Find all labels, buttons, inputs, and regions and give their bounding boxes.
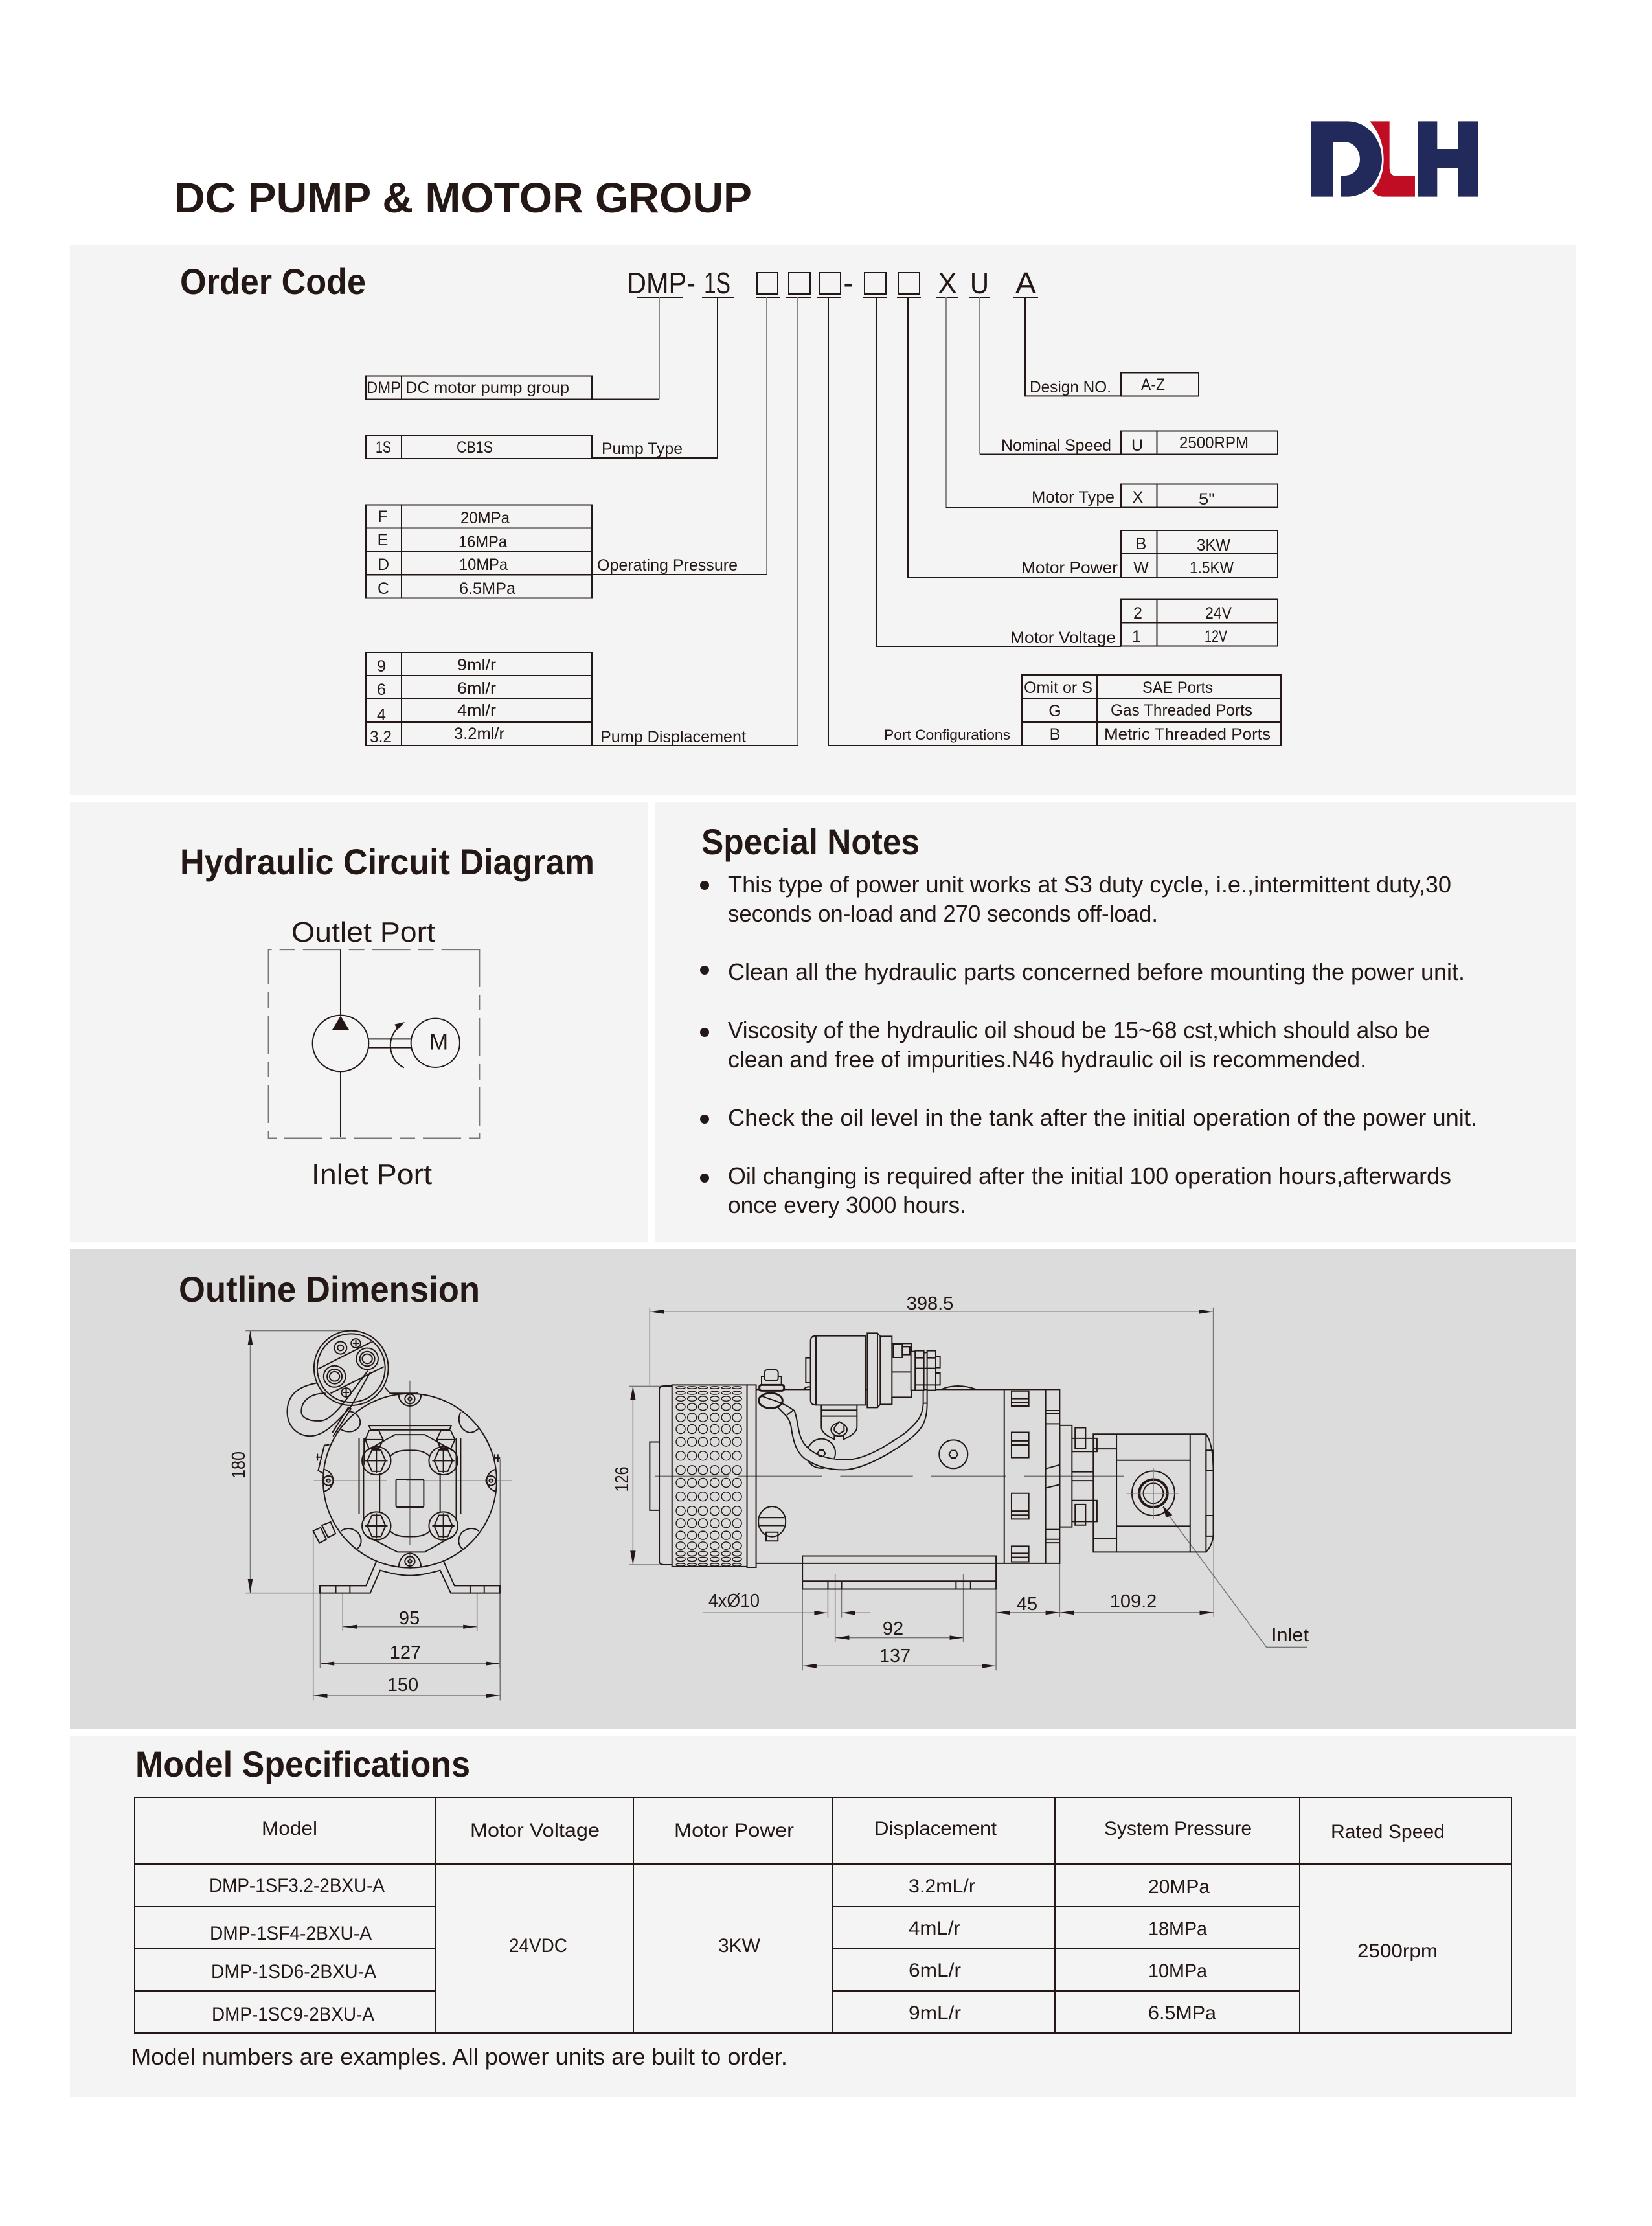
dimension labels: side view: 92 [883,1618,903,1639]
order code formula: A [1015,266,1036,300]
logo: DLH [1311,121,1478,197]
panel: hydraulic circuit diagram [70,802,648,1242]
table: specifications: Motor Power [674,1820,794,1841]
table: operating pressure: 16MPa [458,533,507,551]
motor body [756,1389,1059,1563]
table: DMP: DC motor pump group [405,379,569,397]
table: port configurations: Gas Threaded Ports [1111,701,1252,720]
pump [1059,1425,1072,1527]
table: nominal speed: Nominal Speed [1001,437,1111,455]
footnote: Model numbers are examples. All power units are built to order. [131,2043,787,2070]
table: port configurations: Metric Threaded Ports [1104,725,1271,744]
dimension labels: side view [612,1293,1309,1666]
dimension labels: side view: 109.2 [1110,1591,1157,1612]
panel: outline dimension [70,1249,1576,1729]
table: specifications: 6mL/r [909,1960,961,1981]
table: pump displacement: 9 [377,657,386,676]
dimension labels: side view: 126 [612,1466,633,1492]
dimension labels: side view: 45 [1017,1594,1037,1615]
table: motor type: 5" [1199,490,1215,508]
table: port configurations: G [1048,702,1061,720]
table: specifications: 24VDC [509,1935,567,1957]
table: port configurations [884,675,1281,745]
table: specifications: 3.2mL/r [909,1876,975,1897]
solenoid end [314,1331,389,1405]
table: operating pressure: 20MPa [460,509,510,527]
table: operating pressure [366,505,738,598]
table: specifications: 3KW [718,1935,761,1957]
note 2: Clean all the hydraulic parts concerned before mounting the power unit. [728,959,1465,985]
table: motor type: Motor Type [1032,488,1115,506]
note 3 [700,1017,1430,1073]
order code formula: DMP- [627,266,696,300]
feet [320,1562,500,1593]
note 5: once every 3000 hours. [728,1192,966,1218]
table: pump displacement [366,652,746,746]
motor end mesh [659,1386,672,1565]
table: specifications: 18MPa [1148,1918,1207,1940]
table: nominal speed [1001,431,1278,455]
order code formula [627,266,1038,300]
table: operating pressure: 6.5MPa [459,580,515,598]
dimension lines: front view [245,1331,512,1700]
table: nominal speed: U [1131,437,1143,455]
table: pump type [366,435,683,459]
heading: special notes: Special Notes [701,821,920,862]
table: specifications: DMP-1SC9-2BXU-A [212,2004,374,2025]
note 5 [700,1163,1451,1218]
table: pump displacement: 4ml/r [457,701,496,720]
label: inlet port: Inlet Port [311,1159,432,1190]
table: specifications: 9mL/r [909,2003,961,2024]
table: operating pressure: D [378,556,389,574]
table: specifications: Rated Speed [1331,1821,1445,1843]
table: operating pressure: 10MPa [459,556,508,574]
note 3: clean and free of impurities.N46 hydraulic oil is recommended. [728,1046,1366,1073]
table: nominal speed: 2500RPM [1179,434,1249,452]
table: operating pressure: E [378,531,388,549]
table: pump type: Pump Type [602,440,683,458]
panel: order code [70,245,1576,795]
order code formula: - [843,266,854,300]
motor end face [323,1394,497,1568]
table: DMP [366,376,592,399]
order code formula: X [938,266,957,300]
table: operating pressure: F [378,508,388,526]
table: pump type: 1S [376,438,391,457]
table: port configurations: SAE Ports [1142,679,1213,697]
cable [288,1372,370,1436]
heading: model specifications: Model Specifications [135,1743,470,1784]
table: specifications: 4mL/r [909,1918,960,1939]
dimension labels: front view [229,1451,421,1696]
table: design number: Design NO. [1030,378,1111,396]
table: port configurations: Omit or S [1024,679,1092,697]
table: motor voltage: Motor Voltage [1010,629,1116,647]
table: port configurations: Port Configurations [884,727,1010,743]
table: pump displacement: Pump Displacement [600,728,746,746]
heading: order code: Order Code [180,261,366,302]
note 3: Viscosity of the hydraulic oil shoud be 15~68 cst,which should also be [728,1017,1430,1043]
note 4: Check the oil level in the tank after the initial operation of the power unit. [728,1104,1477,1131]
dimension labels: front view: 150 [387,1675,418,1696]
table: motor voltage: 12V [1205,628,1227,646]
table: pump type: CB1S [457,438,493,457]
label: outlet port: Outlet Port [291,916,435,948]
table: motor type: X [1133,488,1144,506]
note 1 [700,871,1451,927]
table: pump displacement: 9ml/r [457,656,496,674]
dimension lines: side view [629,1308,1307,1670]
table: specifications [135,1797,1511,2033]
panel: model specifications [70,1736,1576,2097]
table: specifications: Motor Voltage [470,1820,600,1841]
drawing: front view [229,1331,512,1700]
table: pump displacement: 4 [377,706,386,724]
circuit symbol [268,949,480,1138]
table: specifications: DMP-1SF4-2BXU-A [210,1923,372,1944]
table: motor voltage: 2 [1133,604,1142,622]
table: pump displacement: 6 [377,681,386,699]
heading: hydraulic circuit diagram: Hydraulic Circuit Diagram [180,841,594,882]
table: specifications: Displacement [874,1818,997,1839]
table: design number: A-Z [1141,376,1165,394]
table: motor power: 1.5KW [1190,559,1234,577]
leader lines [592,297,1121,745]
dimension labels: side view: Inlet [1271,1625,1309,1646]
order code formula: U [970,266,989,300]
table: specifications: DMP-1SF3.2-2BXU-A [209,1875,385,1896]
small hardware [313,1528,326,1543]
dimension labels: side view: 137 [879,1646,911,1666]
table: specifications: DMP-1SD6-2BXU-A [211,1961,376,1982]
table: design number [1030,373,1199,396]
table: motor power: 3KW [1197,536,1230,554]
table: motor power: B [1136,535,1146,553]
table: motor voltage: 24V [1205,604,1232,622]
pump flange and bolts [369,1425,451,1430]
table: specifications: Model [262,1818,317,1839]
table: operating pressure: C [378,580,389,598]
circuit symbol: M [429,1030,448,1055]
dimension labels: front view: 127 [390,1642,421,1663]
dimension labels: front view: 95 [399,1608,420,1629]
table: specifications: 2500rpm [1357,1940,1438,1962]
note 1: This type of power unit works at S3 duty cycle, i.e.,intermittent duty,30 [728,871,1451,898]
table: motor voltage: 1 [1132,628,1141,646]
mounting foot [802,1556,996,1589]
dimension labels: front view: 180 [229,1451,249,1479]
table: motor voltage [1010,600,1278,647]
table: pump displacement: 6ml/r [457,679,496,698]
table: operating pressure: Operating Pressure [597,556,738,574]
table: motor type [1032,484,1278,508]
table: motor power [1021,530,1278,578]
table: pump displacement: 3.2 [370,728,392,746]
table: port configurations: B [1050,725,1060,744]
order code formula: 1S [704,266,730,300]
dimension labels: side view: 4xØ10 [708,1591,760,1611]
dimension labels: side view: 398.5 [907,1293,953,1314]
table: motor power: W [1133,559,1149,577]
table: specifications: System Pressure [1104,1818,1252,1839]
note 5: Oil changing is required after the initial 100 operation hours,afterwards [728,1163,1451,1189]
solenoid, terminal and cable [759,1333,976,1470]
table: motor power: Motor Power [1021,559,1118,577]
title: DC PUMP & MOTOR GROUP [174,174,752,221]
note 1: seconds on-load and 270 seconds off-load. [728,900,1158,927]
table: pump displacement: 3.2ml/r [454,725,504,743]
heading: outline dimension: Outline Dimension [179,1269,480,1310]
drawing: side view [612,1293,1309,1670]
table: specifications: 10MPa [1148,1960,1207,1982]
table: DMP: DMP [367,379,401,397]
table: specifications: 20MPa [1148,1876,1210,1898]
table: specifications: 6.5MPa [1148,2003,1216,2024]
panel: special notes [655,802,1576,1242]
